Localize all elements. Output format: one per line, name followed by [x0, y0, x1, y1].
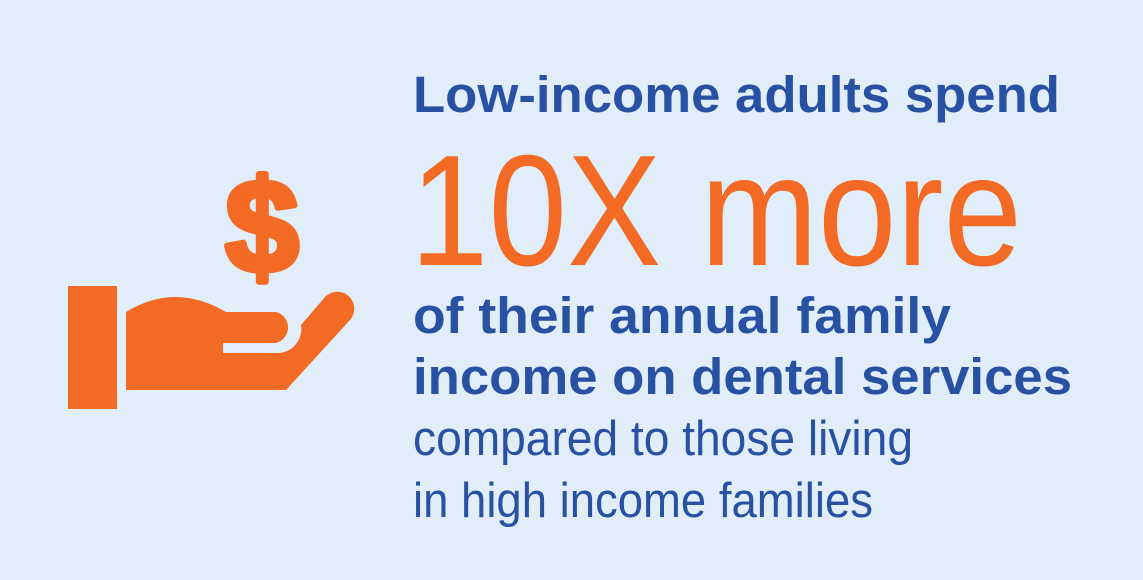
heading: low-income adults spend: Low-income adults spend — [413, 66, 1060, 123]
headline text block — [410, 66, 1072, 528]
big stat: 10X more: 10X more — [410, 123, 1022, 299]
icon: dollar sign: $ — [225, 153, 299, 300]
icon: hand — [126, 292, 354, 390]
icon: cuff — [68, 286, 117, 409]
light line: in high income families: in high income families — [413, 474, 873, 528]
bold line: income on dental services: income on dental services — [413, 348, 1072, 405]
light line: compared to those living: compared to those living — [413, 412, 913, 466]
icon: hand holding dollar — [68, 153, 354, 409]
bold line: of their annual family: of their annual family — [413, 287, 952, 344]
